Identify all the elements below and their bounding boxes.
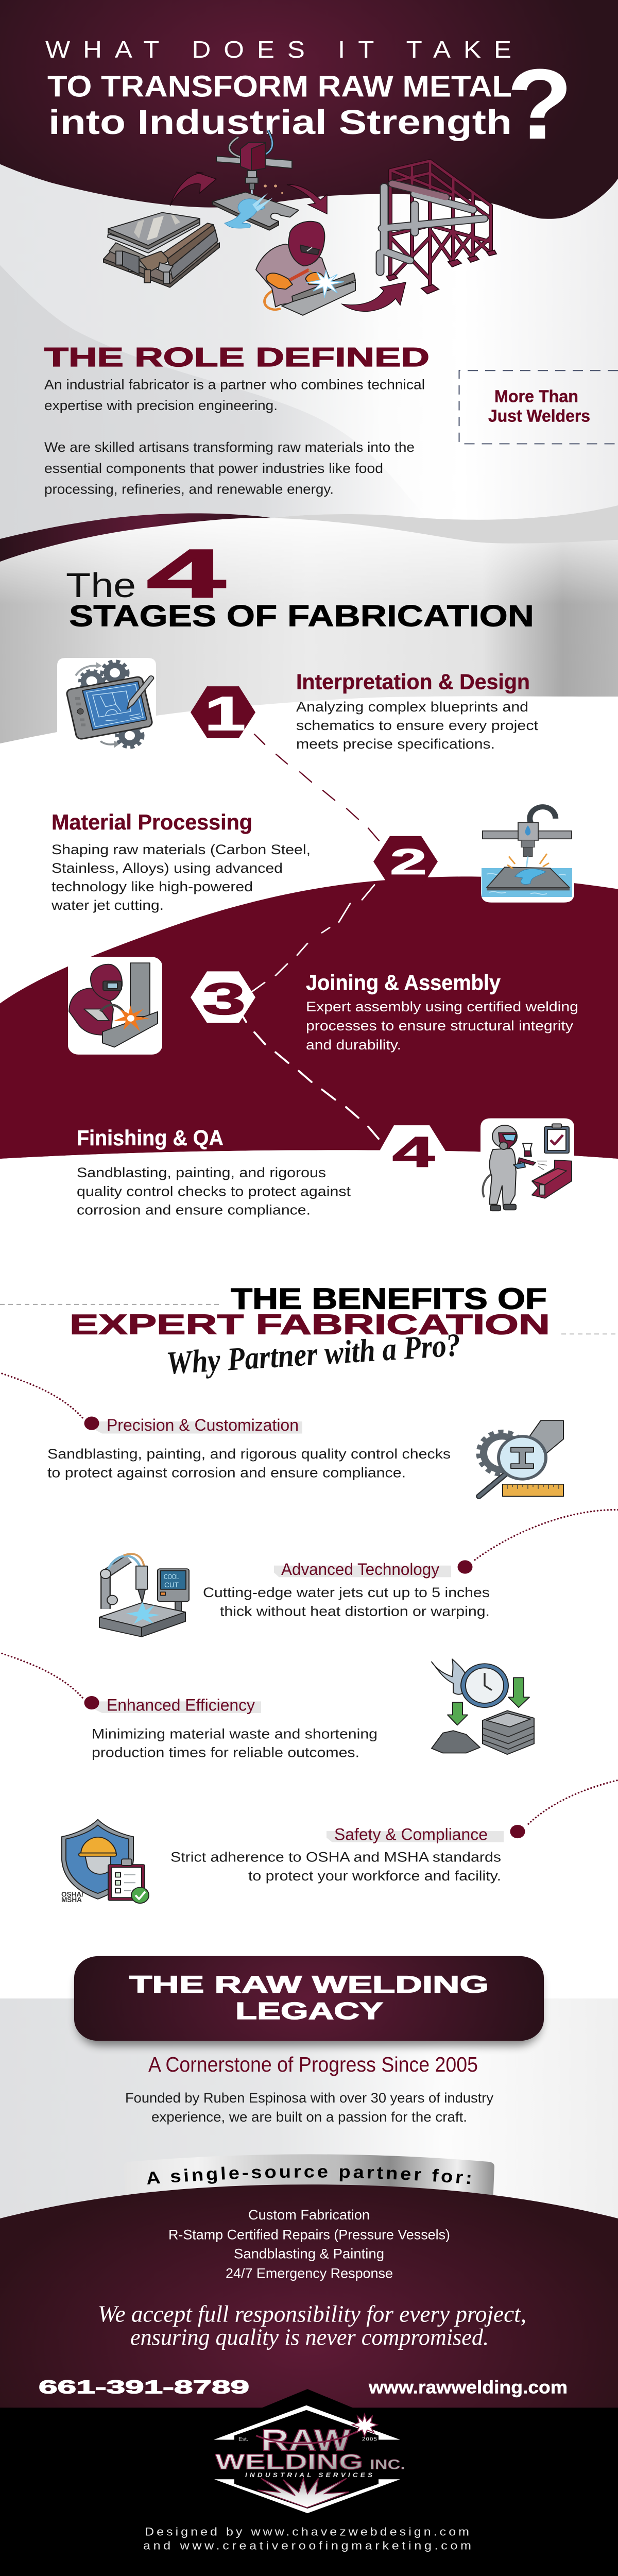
credits: and www.creativeroofingmarketing.com (143, 2539, 471, 2552)
callout: more than just welders (459, 370, 618, 444)
hexagon: step 2 (373, 836, 438, 887)
text: joining and assembly: processes to ensure structural integrity (306, 1018, 573, 1033)
contact: phone: 661-391-8789 (39, 2377, 249, 2398)
icon: structure foot plates (386, 250, 496, 294)
text: joining and assembly: Joining & Assembly (306, 971, 501, 995)
logo: WELDING (215, 2450, 363, 2474)
title: ? (507, 49, 573, 160)
text: finishing and QA (77, 1126, 351, 1217)
text block: role description: expertise with precision engineering. (44, 398, 278, 413)
icon: water jet cutter (213, 130, 299, 230)
text: interpretation and design: Interpretation & Design (296, 670, 530, 694)
icon: robotic cutting cell: COOL (164, 1573, 179, 1581)
text: material processing: Stainless, Alloys) using advanced (52, 860, 283, 876)
logo: INDUSTRIAL SERVICES (245, 2471, 372, 2479)
icon card: finishing and QA (480, 1118, 574, 1211)
list: services: 24/7 Emergency Response (226, 2266, 393, 2281)
subheading: cornerstone of progress: A Cornerstone of Progress Since 2005 (148, 2053, 478, 2076)
ribbon (0, 513, 272, 562)
list: services (168, 2207, 450, 2281)
text: joining and assembly: and durability. (306, 1037, 401, 1053)
contact: website: www.rawwelding.com (368, 2377, 568, 2397)
arrow: dashed connector step 2 to step 3 (252, 885, 374, 991)
text: joining and assembly (306, 971, 578, 1053)
text: interpretation and design (296, 670, 538, 752)
logo: 2005 (362, 2437, 377, 2442)
arrow: dashed connector step 1 to step 2 (254, 734, 379, 841)
title: WHAT DOES IT TAKE (45, 37, 511, 63)
hexagon: step 4: 4 (392, 1128, 435, 1176)
text block: founder: experience, we are built on a passion for the craft. (151, 2110, 467, 2125)
benefit: precision and customization: Sandblasting, painting, and rigorous quality control checks (47, 1447, 451, 1462)
icon card: water jet (481, 803, 574, 903)
text: interpretation and design: Analyzing complex blueprints and (296, 699, 528, 715)
stages background panel (0, 505, 618, 762)
credits: Designed by www.chavezwebdesign.com (145, 2526, 469, 2538)
benefit: safety and compliance: Strict adherence to OSHA and MSHA standards (170, 1850, 501, 1865)
heading: the 4 stages of fabrication: 4 (147, 535, 226, 612)
benefit: precision and customization (2, 1374, 451, 1480)
subheading: why partner with a pro: Why Partner with a Pro? (165, 1327, 462, 1381)
arrow: welder to structure (342, 282, 406, 311)
icon: robotic cutting cell: CUT (164, 1582, 179, 1589)
text: material processing: water jet cutting. (51, 898, 164, 913)
heading: the 4 stages of fabrication: STAGES OF FABRICATION (69, 600, 534, 633)
arrow: stack to water jet (170, 172, 216, 206)
text block: founder (125, 2091, 493, 2125)
benefit: enhanced efficiency (2, 1653, 377, 1760)
benefit: advanced technology: Advanced Technology (281, 1560, 439, 1579)
text: material processing: Shaping raw materials (Carbon Steel, (52, 842, 311, 857)
text: material processing: technology like high-powered (52, 879, 253, 894)
hexagon: step 3 (191, 971, 255, 1024)
text: material processing: Material Processing (52, 810, 252, 835)
callout: more than just welders: Just Welders (488, 406, 590, 426)
banner: the raw welding legacy: LEGACY (235, 1998, 383, 2024)
text: interpretation and design: schematics to ensure every project (296, 718, 538, 733)
text block: role description (44, 377, 425, 497)
quote: full responsibility: ensuring quality is never compromised. (130, 2325, 489, 2350)
text: interpretation and design: meets precise specifications. (296, 736, 495, 752)
text block: role description: We are skilled artisans transforming raw materials into the (44, 440, 415, 455)
text: material processing (51, 810, 311, 913)
maroon stage band (0, 876, 618, 1159)
icon label: OSHA MSHA (61, 1891, 83, 1904)
benefit: safety and compliance: to protect your workforce and facility. (248, 1868, 501, 1884)
callout: more than just welders: More Than (494, 387, 578, 406)
hexagon: step 2: 2 (390, 841, 427, 882)
benefit: advanced technology (203, 1510, 618, 1619)
text: finishing and QA: corrosion and ensure compliance. (77, 1202, 311, 1217)
hexagon: step 1: 1 (204, 687, 246, 740)
icon: safety shield and checklist (62, 1820, 149, 1903)
text block: role description: An industrial fabricator is a partner who combines technical (44, 377, 425, 392)
hexagon: step 4 (380, 1125, 445, 1176)
benefit: safety and compliance (170, 1781, 617, 1884)
benefit: safety and compliance: Safety & Compliance (334, 1825, 488, 1844)
quote: full responsibility: We accept full responsibility for every project, (98, 2301, 526, 2327)
arrow: water jet to welder (287, 184, 327, 214)
icon: clock, arrows, scrap and stacked sheets (432, 1659, 534, 1754)
ribbon: single-source partner (147, 2154, 494, 2195)
benefit: precision and customization: Precision & Customization (107, 1416, 299, 1435)
text: finishing and QA: quality control checks to protect against (77, 1184, 351, 1199)
heading: benefits of expert fabrication (0, 1282, 618, 1341)
logo: Est. (238, 2437, 248, 2442)
list: services: R-Stamp Certified Repairs (Pressure Vessels) (168, 2227, 450, 2242)
legacy background panel (0, 1998, 618, 2231)
title: TO TRANSFORM RAW METAL (47, 70, 512, 104)
benefit: precision and customization: to protect against corrosion and ensure compliance. (47, 1465, 406, 1480)
benefit: enhanced efficiency: Enhanced Efficiency (107, 1696, 255, 1715)
list: services: Custom Fabrication (248, 2207, 370, 2222)
hexagon: step 3: 3 (202, 974, 246, 1024)
heading: the 4 stages of fabrication (66, 535, 534, 633)
icon label: OSHA MSHA: OSHA/ (61, 1891, 83, 1899)
heading: the role defined: THE ROLE DEFINED (44, 343, 430, 372)
hexagon: step 1 (191, 686, 255, 740)
header blob (0, 0, 618, 219)
logo (214, 2405, 405, 2513)
heading: benefits of expert fabrication: EXPERT FABRICATION (70, 1309, 550, 1341)
icon label: OSHA MSHA: MSHA (61, 1896, 82, 1904)
icon card: joining and assembly (68, 957, 162, 1055)
text block: founder: Founded by Ruben Espinosa with over 30 years of industry (125, 2091, 493, 2106)
text: finishing and QA: Finishing & QA (77, 1126, 224, 1150)
quote: full responsibility (98, 2301, 526, 2350)
logo: RAW (261, 2424, 351, 2458)
title: into Industrial Strength (48, 103, 512, 141)
icon: weld spark (306, 270, 344, 298)
text block: role description: essential components that power industries like food (44, 461, 383, 476)
upper background panel (0, 140, 618, 604)
icon: welder (256, 222, 355, 315)
list: services: Sandblasting & Painting (234, 2246, 384, 2261)
banner: the raw welding legacy (74, 1956, 544, 2046)
icon: robotic cutting cell (99, 1554, 189, 1637)
benefit: advanced technology: thick without heat distortion or warping. (220, 1604, 490, 1619)
heading: benefits of expert fabrication: THE BENEFITS OF (231, 1282, 547, 1315)
closing maroon panel (0, 2184, 618, 2409)
benefit: enhanced efficiency: production times for reliable outcomes. (92, 1745, 359, 1760)
benefit: enhanced efficiency: Minimizing material waste and shortening (92, 1726, 377, 1741)
icon: stack of raw metal (104, 212, 219, 287)
icon: magnifier gear and ruler (478, 1420, 563, 1496)
banner: the raw welding legacy: THE RAW WELDING (129, 1972, 489, 1998)
title (45, 37, 573, 160)
footer panel (0, 2389, 618, 2576)
icon card: interpretation and design (57, 658, 156, 748)
benefit: advanced technology: Cutting-edge water jets cut up to 5 inches (203, 1585, 490, 1600)
credits (143, 2526, 471, 2552)
text: joining and assembly: Expert assembly using certified welding (306, 999, 578, 1014)
heading: the 4 stages of fabrication: The (66, 566, 136, 604)
text: finishing and QA: Sandblasting, painting, and rigorous (77, 1165, 326, 1180)
ribbon: single-source partner: A single-source partner for: (147, 2167, 471, 2184)
logo: INC. (370, 2457, 405, 2472)
text block: role description: processing, refineries, and renewable energy. (44, 482, 334, 497)
arrow: dashed connector step 3 to step 4 (243, 1017, 379, 1139)
icon: steel structure with pipes (380, 161, 491, 291)
white lower stage panel (0, 1150, 618, 1190)
